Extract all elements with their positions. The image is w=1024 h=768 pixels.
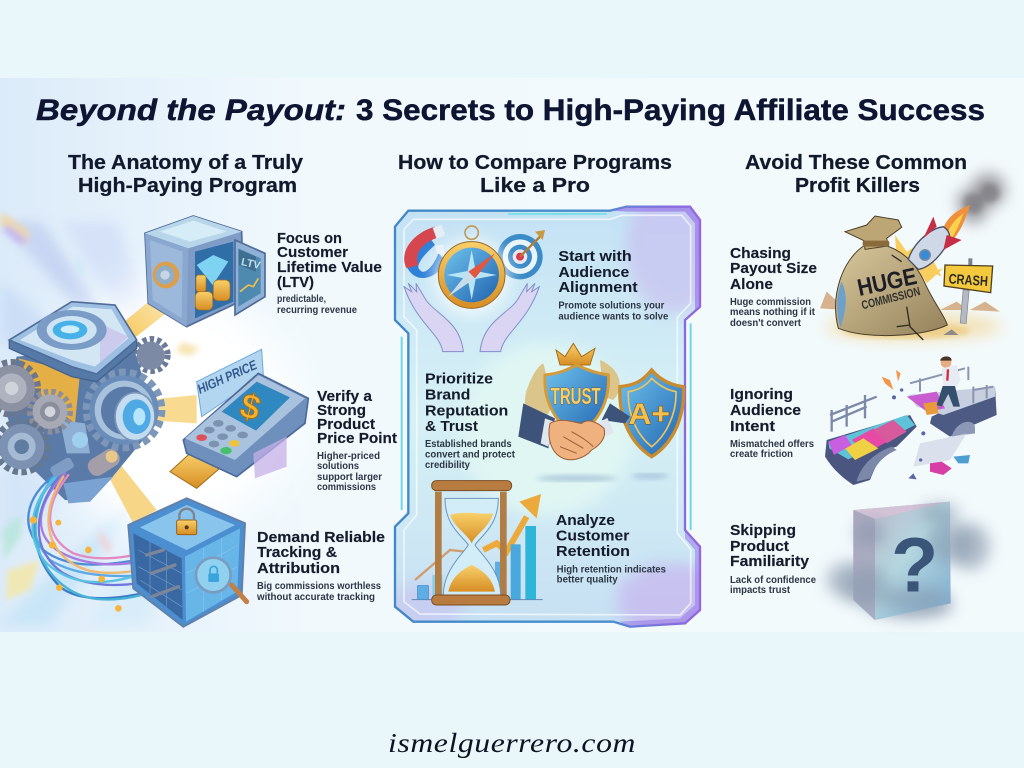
card 2 text: product price point: Higher-priced	[317, 451, 380, 462]
card 2 text: product price point	[317, 388, 397, 493]
text: audience alignment	[558, 248, 669, 322]
text: chasing payout: Chasing	[730, 245, 791, 262]
card 1 text: customer lifetime value: predictable,	[277, 294, 326, 305]
icon: trust shields and handshake: A+	[628, 398, 670, 431]
illustration: broken puzzle bridge	[825, 356, 997, 485]
illustration: tracking cube with padlock and magnifier	[128, 498, 247, 627]
heading: profit killers column: Profit Killers	[795, 175, 920, 197]
illustration: safe with diamond	[145, 216, 265, 327]
card 1 text: customer lifetime value: recurring revenue	[277, 305, 357, 316]
heading: compare column: How to Compare Programs	[398, 152, 672, 174]
heading: anatomy column: The Anatomy of a Truly	[68, 152, 304, 174]
card 1 text: customer lifetime value: (LTV)	[277, 274, 314, 291]
text: ignoring intent	[730, 386, 814, 460]
top plate	[9, 302, 137, 382]
card 1 text: customer lifetime value: Customer	[277, 244, 348, 261]
text: skipping familiarity	[730, 522, 816, 596]
text: skipping familiarity: Lack of confidence	[730, 575, 816, 586]
text: brand reputation: Reputation	[425, 402, 508, 419]
text: ignoring intent: create friction	[730, 449, 793, 460]
heading: profit killers column	[745, 152, 967, 197]
heading: profit killers column: Avoid These Common	[745, 152, 967, 174]
text: brand reputation: Established brands	[425, 439, 512, 450]
infographic canvas	[0, 78, 1024, 632]
card 3 text: tracking and attribution: Big commissions worthless	[257, 581, 381, 592]
text: audience alignment: audience wants to solve	[558, 311, 669, 322]
text: brand reputation: convert and protect	[425, 449, 516, 460]
panel: compare programs	[394, 206, 702, 628]
illustration: payment terminal with high price tag	[170, 349, 308, 488]
rays to the three cards	[103, 287, 197, 523]
card 3 text: tracking and attribution: Demand Reliable	[257, 529, 385, 546]
card 2 text: product price point: Strong	[317, 402, 366, 419]
text: chasing payout: Payout Size	[730, 260, 817, 277]
illustration: safe with diamond: LTV	[240, 256, 262, 272]
card 1 text: customer lifetime value	[277, 230, 382, 316]
text: brand reputation: credibility	[425, 460, 470, 471]
cable connector	[72, 432, 120, 476]
card 1 text: customer lifetime value: Lifetime Value	[277, 259, 382, 276]
rear gear	[136, 339, 168, 371]
card 2 text: product price point: Product	[317, 416, 375, 433]
text: brand reputation: Prioritize	[425, 371, 493, 388]
heading: compare column	[398, 152, 672, 197]
text: customer retention: Customer	[556, 527, 629, 544]
text: chasing payout: Alone	[730, 276, 773, 293]
text: brand reputation	[425, 371, 516, 471]
card 3 text: tracking and attribution: Tracking &	[257, 544, 337, 561]
panel frame	[394, 206, 702, 628]
text: brand reputation: Brand	[425, 386, 470, 403]
text: customer retention: better quality	[557, 575, 618, 586]
text: chasing payout	[730, 245, 817, 329]
illustration: commission sack and crashing rocket	[820, 173, 1005, 341]
gear mid	[30, 392, 70, 432]
text: audience alignment: Audience	[558, 264, 629, 281]
card 2 text: product price point: Price Point	[317, 430, 397, 447]
text: chasing payout: Huge commission	[730, 297, 811, 308]
text: skipping familiarity: impacts trust	[730, 585, 791, 596]
icon: magnet, compass, target and hands	[404, 225, 545, 352]
text: customer retention: Retention	[556, 543, 630, 560]
engine body	[3, 347, 157, 502]
text: brand reputation: & Trust	[425, 418, 478, 435]
text: skipping familiarity: Familiarity	[730, 553, 810, 570]
illustration: commission sack and crashing rocket: HUGE	[855, 263, 919, 302]
text: ignoring intent: Mismatched offers	[730, 439, 814, 450]
card 2 text: product price point: Verify a	[317, 388, 373, 405]
card 3 text: tracking and attribution: without accurate tracking	[256, 592, 375, 603]
title: Beyond the Payout:	[36, 94, 346, 127]
illustration: payment terminal with high price tag: HIGH PRICE	[195, 357, 260, 397]
text: ignoring intent: Ignoring	[730, 386, 793, 403]
title: 3 Secrets to High-Paying Affiliate Success	[356, 94, 985, 127]
icon: trust shields and handshake	[518, 343, 683, 460]
card 2 text: product price point: support larger	[317, 472, 382, 483]
title	[36, 94, 985, 127]
text: ignoring intent: Audience	[730, 402, 801, 419]
gear main	[87, 373, 161, 447]
card 3 text: tracking and attribution	[256, 529, 385, 603]
text: audience alignment: Start with	[558, 248, 632, 265]
icon: trust shields and handshake: TRUST	[551, 383, 601, 409]
website footer: ismelguerrero.com	[388, 728, 636, 758]
illustration: glowing engine with rays and cables	[0, 212, 308, 627]
card 2 text: product price point: commissions	[317, 482, 376, 493]
figure: worried man	[937, 356, 961, 407]
illustration: foggy box with question mark: ?	[891, 523, 938, 609]
heading: anatomy column: High-Paying Program	[78, 175, 297, 197]
text: customer retention: Analyze	[556, 512, 615, 529]
text: customer retention: High retention indicates	[557, 564, 666, 575]
card 2 text: product price point: solutions	[317, 461, 359, 472]
text: audience alignment: Promote solutions your	[558, 301, 664, 312]
text: skipping familiarity: Product	[730, 538, 789, 555]
card 1 text: customer lifetime value: Focus on	[277, 230, 342, 247]
text: ignoring intent: Intent	[730, 418, 775, 435]
gear left	[0, 362, 38, 414]
illustration: foggy box with question mark	[827, 502, 990, 620]
card 3 text: tracking and attribution: Attribution	[257, 560, 340, 577]
gear bottom	[0, 421, 47, 472]
illustration: commission sack and crashing rocket: CRASH	[948, 270, 988, 289]
illustration: payment terminal with high price tag: $	[236, 386, 265, 429]
shadow under handshake	[537, 473, 668, 481]
text: skipping familiarity: Skipping	[730, 522, 796, 539]
icon: hourglass with growth chart	[412, 481, 543, 605]
text: customer retention	[556, 512, 666, 586]
illustration: commission sack and crashing rocket: COMMISSION	[860, 284, 922, 312]
illustration group: profit killers	[820, 173, 1005, 620]
fibre cables	[27, 472, 142, 601]
heading: anatomy column	[68, 152, 304, 197]
text: audience alignment: Alignment	[558, 279, 638, 296]
text: chasing payout: doesn't convert	[730, 318, 802, 329]
heading: compare column: Like a Pro	[480, 175, 590, 197]
text: chasing payout: means nothing if it	[730, 307, 816, 318]
